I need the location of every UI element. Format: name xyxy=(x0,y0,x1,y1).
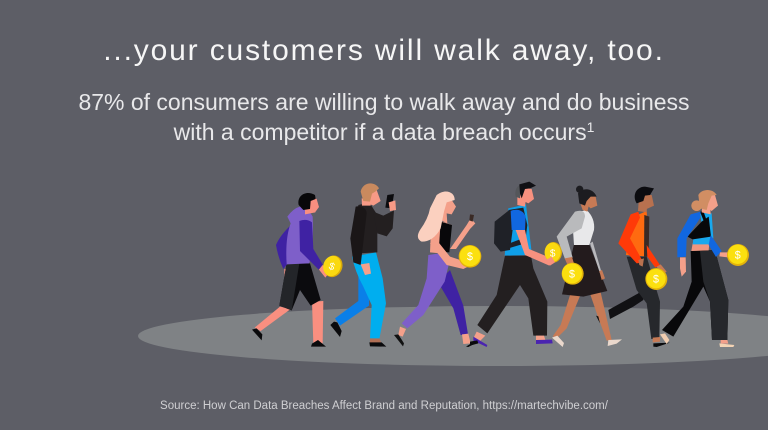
coin xyxy=(645,268,667,290)
source note: Source: How Can Data Breaches Affect Brand and Reputation, https://martechvibe.com/ xyxy=(160,400,608,412)
person 7: blue crop top xyxy=(660,190,749,347)
coin: $ xyxy=(735,249,741,261)
subtitle: with a competitor if a data breach occurs1 xyxy=(174,119,594,145)
coin xyxy=(320,253,346,280)
coin xyxy=(545,242,562,263)
coin xyxy=(562,263,584,285)
coin: $ xyxy=(327,261,337,273)
coin: $ xyxy=(569,268,575,280)
group: left three people xyxy=(252,183,481,347)
person 5: white top striped skirt xyxy=(552,186,622,347)
coin: $ xyxy=(653,274,659,286)
coin: $ xyxy=(550,248,556,259)
coin xyxy=(727,244,749,266)
coin: $ xyxy=(467,251,473,263)
person 6: orange jacket xyxy=(596,187,670,347)
group: right four people xyxy=(470,182,749,347)
ground ellipse xyxy=(138,306,768,366)
person 1: purple hoodie xyxy=(252,193,346,347)
title: ...your customers will walk away, too. xyxy=(103,34,665,67)
subtitle: 87% of consumers are willing to walk away and do business xyxy=(78,89,690,115)
subtitle xyxy=(78,89,690,145)
person 3: blonde woman purple leggings xyxy=(394,191,481,347)
person 4: backpack blue shirt xyxy=(470,182,562,347)
person 2: black sweater blue jeans xyxy=(330,183,396,347)
coin xyxy=(459,245,481,268)
